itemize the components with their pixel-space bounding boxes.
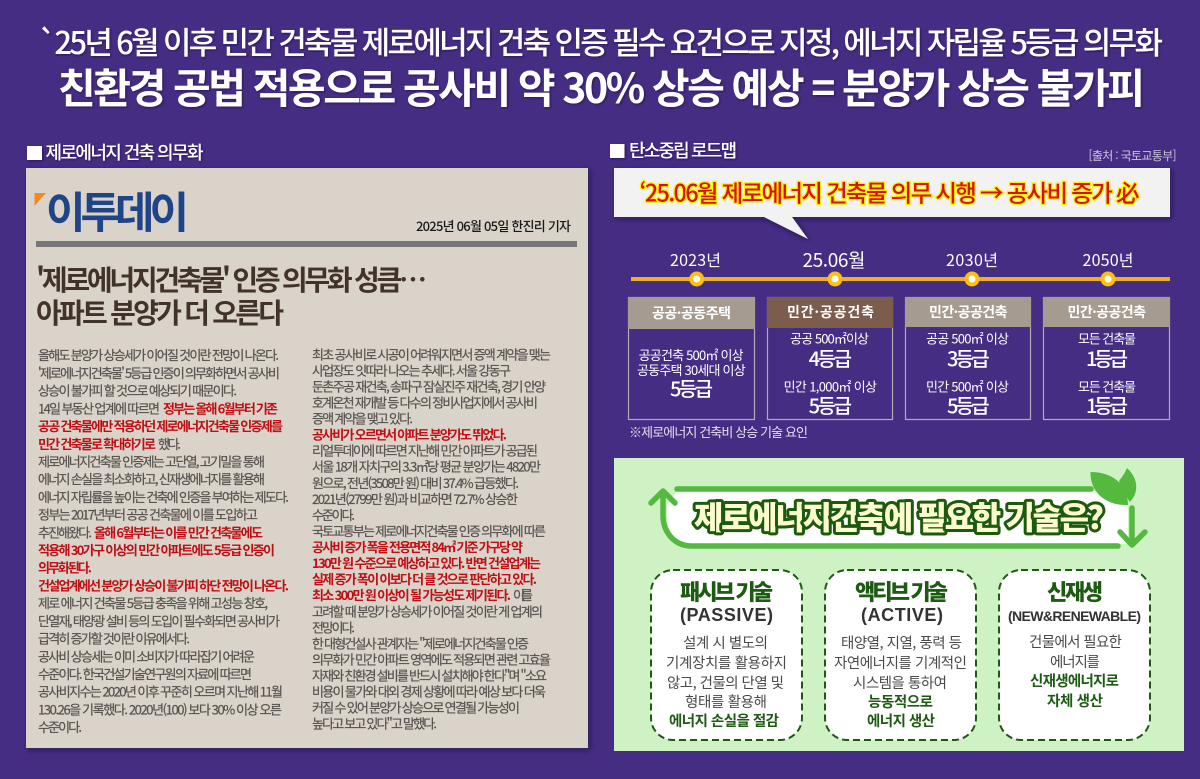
article body: left column: 올해 6월부터는 이를 민간 건축물에도	[94, 522, 263, 541]
roadmap box: 25.06	[767, 297, 893, 420]
title line 1: `25년 6월 이후 민간 건축물 제로에너지 건축 인증 필수 요건으로 지정, 에너지 자립율 5등급 의무화	[38, 18, 1163, 63]
callout	[614, 168, 1170, 239]
article body: right column: 최초 공사비로 시공이 어려워지면서 증액 계약을 맺는	[312, 344, 551, 363]
article body: right column: 사업장도 잇따라 나오는 추세다. 서울 강동구	[312, 360, 511, 379]
timeline point: 25.06: 25.06월	[802, 246, 866, 273]
card: passive: 설계 시 별도의	[683, 632, 768, 653]
panel: newspaper article	[26, 168, 588, 748]
roadmap box: 2050: 모든 건축물	[1078, 328, 1136, 348]
article headline: 아파트 분양가 더 오른다	[36, 292, 284, 332]
article body: right column: 커질 수 있어 분양가 상승으로 연결될 가능성이	[312, 698, 520, 717]
callout: ‘25.06월 제로에너지 건축물 의무 시행 → 공사비 증가 必	[640, 174, 1140, 208]
article body: left column: 추진해왔다.	[38, 522, 92, 541]
timeline axis	[631, 277, 1170, 281]
article body: right column: 국토교통부는 제로에너지건축물 인증 의무화에 따른	[312, 521, 546, 540]
article body: left column: 수준이다. 한국건설기술연구원의 자료에 따르면	[38, 664, 252, 683]
card: active: 능동적으로	[868, 691, 933, 712]
title line 2: 친환경 공법 적용으로 공사비 약 30% 상승 예상 = 분양가 상승 불가피	[58, 55, 1145, 115]
roadmap box: 2050	[1043, 297, 1170, 420]
card: active: 태양열, 지열, 풍력 등	[841, 632, 962, 653]
roadmap box: 25.06: 4등급	[809, 343, 852, 372]
roadmap box: 2030: 민간 500㎡ 이상	[926, 376, 1009, 396]
article body: right column: 높다고 보고 있다"고 말했다.	[312, 714, 437, 733]
article body: left column: 민간 건축물로 확대하기로	[38, 434, 156, 453]
timeline point: 2023: 2023년	[670, 247, 721, 271]
timeline point: 25.06	[802, 246, 866, 286]
roadmap box: 2023: 공공건축 500㎡ 이상	[639, 345, 744, 364]
article body: right column	[312, 344, 551, 733]
timeline point: 2050: 2050년	[1082, 247, 1134, 271]
timeline point: 2030	[946, 247, 998, 286]
heading: zero energy mandate: 제로에너지 건축 의무화	[46, 139, 204, 165]
article body: right column: 한 대형건설사 관계자는 "제로에너지건축물 인증	[312, 633, 529, 652]
article body: left column: 에너지 손실을 최소화하고, 신재생에너지를 활용해	[38, 469, 265, 488]
card: active: 에너지 생산	[867, 710, 935, 731]
article body: right column: 호계온천 재개발 등 다수의 정비사업지에서 공사비	[312, 392, 538, 412]
article body: right column: 수준이다.	[312, 505, 355, 524]
article body: right column: 자재와 친환경 설비를 반드시 설치해야 한다"며 "소요	[312, 666, 547, 684]
roadmap box: 2023: 공공·공동주택	[652, 303, 731, 323]
article body: left column: 제로에너지건축물 인증제는 고단열, 고기밀을 통해	[38, 452, 265, 470]
roadmap box: 2030: 5등급	[947, 390, 990, 419]
timeline point: 2030: 2030년	[946, 247, 998, 271]
article body: left column: 에너지 자립률을 높이는 건축에 인증을 부여하는 제도다.	[38, 487, 289, 506]
article body: right column: 2021년(2799만 원)과 비교하면 72.7% 상승한	[312, 489, 518, 508]
card: passive: 에너지 손실을 절감	[669, 710, 779, 731]
card: renewable: 신재생	[1047, 575, 1103, 607]
roadmap box: 25.06: 민간·공공건축	[787, 302, 874, 322]
card: passive: 형태를 활용해	[685, 691, 767, 712]
timeline point: 2023	[670, 247, 721, 286]
article body: right column: 130만 원 수준으로 예상하고 있다. 반면 건설업계는	[312, 553, 541, 572]
article body: left column: '제로에너지건축물' 5등급 인증이 의무화하면서 공사비	[38, 363, 280, 382]
roadmap box: 2050: 1등급	[1086, 390, 1128, 419]
article body: left column: 의무화된다.	[38, 558, 92, 577]
article body: right column: 원으로, 전년(3508만 원) 대비 37.4% 급등했다.	[312, 473, 519, 492]
article body: right column: 증액 계약을 맺고 있다.	[312, 408, 413, 428]
article body: right column: 전망이다.	[312, 617, 355, 636]
roadmap box: 2030: 3등급	[947, 343, 990, 372]
article body: right column: 최소 300만 원 이상이 될 가능성도 제기된다.	[312, 585, 511, 604]
card: active	[825, 570, 976, 740]
timeline	[631, 246, 1170, 286]
article body: left column: 적용해 30가구 이상의 민간 아파트에도 5등급 인증이	[38, 540, 275, 559]
article body: right column: 고려할 때 분양가 상승세가 이어질 것이란 게 업계의	[312, 601, 543, 620]
article body: left column: 130.26을 기록했다. 2020년(100) 보다 30% 이상 오른	[38, 699, 282, 718]
article body: left column: 정부는 올해 6월부터 기존	[163, 398, 278, 417]
card: passive: 기계장치를 활용하지	[666, 652, 787, 673]
article body: left column: 급격히 증가할 것이란 이유에서다.	[38, 629, 190, 648]
article body: left column: 제로 에너지 건축물 5등급 충족을 위해 고성능 창호,	[38, 593, 268, 612]
article body: left column: 수준이다.	[38, 717, 82, 736]
article body: right column: 실제 증가 폭이 이보다 더 클 것으로 판단하고 있다.	[312, 569, 537, 588]
article body: right column: 이를	[513, 585, 533, 604]
article body: right column: 공사비 증가 폭을 전용면적 84㎡ 기준 가구당 약	[312, 537, 523, 556]
banner heading: 제로에너지건축에 필요한 기술은?	[694, 493, 1104, 539]
timeline point: 2050	[1082, 247, 1134, 286]
article body: left column: 공공 건축물에만 적용하던 제로에너지건축물 인증제를	[38, 416, 283, 435]
card: passive: (PASSIVE)	[680, 605, 773, 625]
article body: left column: 공사비지수는 2020년 이후 꾸준히 오르며 지난해 11월	[38, 682, 283, 701]
article body: right column: 둔촌주공 재건축, 송파구 잠실진주 재건축, 경기 안양	[312, 376, 546, 395]
roadmap box: 25.06: 공공 500㎡이상	[790, 328, 869, 348]
roadmap footnote: ※제로에너지 건축비 상승 기술 요인	[629, 422, 808, 441]
roadmap box: 2050: 1등급	[1086, 343, 1128, 372]
card: active: (ACTIVE)	[861, 605, 943, 625]
article date and reporter: 2025년 06월 05일 한진리 기자	[416, 216, 571, 235]
panel: required technologies	[614, 458, 1184, 751]
roadmap box: 2023: 공동주택 30세대 이상	[637, 360, 746, 379]
card: renewable	[999, 570, 1150, 740]
roadmap box: 2050: 모든 건축물	[1078, 376, 1136, 396]
card: renewable: 신재생에너지로	[1030, 670, 1119, 691]
article headline: '제로에너지건축물' 인증 의무화 성큼…	[36, 259, 427, 299]
card: active: 자연에너지를 기계적인	[834, 652, 967, 673]
article body: right column: 공사비가 오르면서 아파트 분양가도 뛰었다.	[312, 425, 507, 444]
roadmap box: 2023: 5등급	[670, 373, 713, 402]
article body: left column: 단열재, 태양광 설비 등의 도입이 필수화되면 공사비가	[38, 611, 280, 630]
card: active: 액티브 기술	[855, 575, 948, 607]
article body: left column: 건설업계에선 분양가 상승이 불가피 하단 전망이 나온다.	[38, 575, 289, 594]
card: passive	[651, 570, 802, 740]
article body: left column: 했다.	[158, 434, 181, 453]
article body: right column: 의무화가 민간 아파트 영역에도 적용되면 관련 고효율	[312, 649, 551, 668]
roadmap box: 25.06: 민간 1,000㎡ 이상	[784, 376, 877, 396]
article body: right column: 리얼투데이에 따르면 지난해 민간 아파트가 공급된	[312, 441, 538, 460]
banner white shape	[667, 491, 1128, 544]
card: active: 시스템을 통하여	[853, 672, 947, 693]
article body: left column: 상승이 불가피 할 것으로 예상되기 때문이다.	[38, 381, 237, 400]
article body: left column: 공사비 상승세는 이미 소비자가 따라잡기 어려운	[38, 646, 255, 665]
article headline	[36, 259, 427, 332]
roadmap box: 2023	[628, 297, 755, 420]
article body: left column: 올해도 분양가 상승세가 이어질 것이란 전망이 나온다.	[38, 345, 279, 364]
article body: left column: 정부는 2017년부터 공공 건축물에 이를 도입하고	[38, 505, 258, 524]
card: renewable: (NEW&RENEWABLE)	[1008, 608, 1141, 624]
icon: newspaper logo: 이투데이	[46, 179, 189, 241]
card: renewable: 에너지를	[1050, 651, 1100, 672]
card: passive: 않고, 건물의 단열 및	[667, 672, 784, 693]
icon: leaves	[1090, 468, 1136, 505]
source note: [출처 : 국토교통부]	[1088, 147, 1176, 164]
roadmap box: 2030: 공공 500㎡ 이상	[926, 328, 1009, 348]
title	[38, 18, 1163, 115]
card: renewable: 건물에서 필요한	[1029, 631, 1122, 652]
article body: right column: 비용이 물가와 대외 경제 상황에 따라 예상 보다 더욱	[312, 682, 546, 701]
arrow: circular green arrows	[651, 489, 1145, 546]
article body: right column: 서울 18개 자치구의 3.3㎡당 평균 분양가는 4820만	[312, 457, 541, 476]
roadmap box: 2030: 민간·공공건축	[929, 302, 1008, 322]
heading: carbon neutral roadmap: 탄소중립 로드맵	[629, 137, 737, 163]
roadmap box: 2030	[905, 297, 1031, 420]
roadmap box: 25.06: 5등급	[809, 390, 852, 419]
article body: left column: 14일 부동산 업계에 따르면	[38, 398, 160, 417]
roadmap box: 2050: 민간·공공건축	[1068, 302, 1146, 322]
card: passive: 패시브 기술	[680, 575, 773, 607]
article body: left column	[38, 345, 289, 736]
card: renewable: 자체 생산	[1047, 690, 1103, 711]
